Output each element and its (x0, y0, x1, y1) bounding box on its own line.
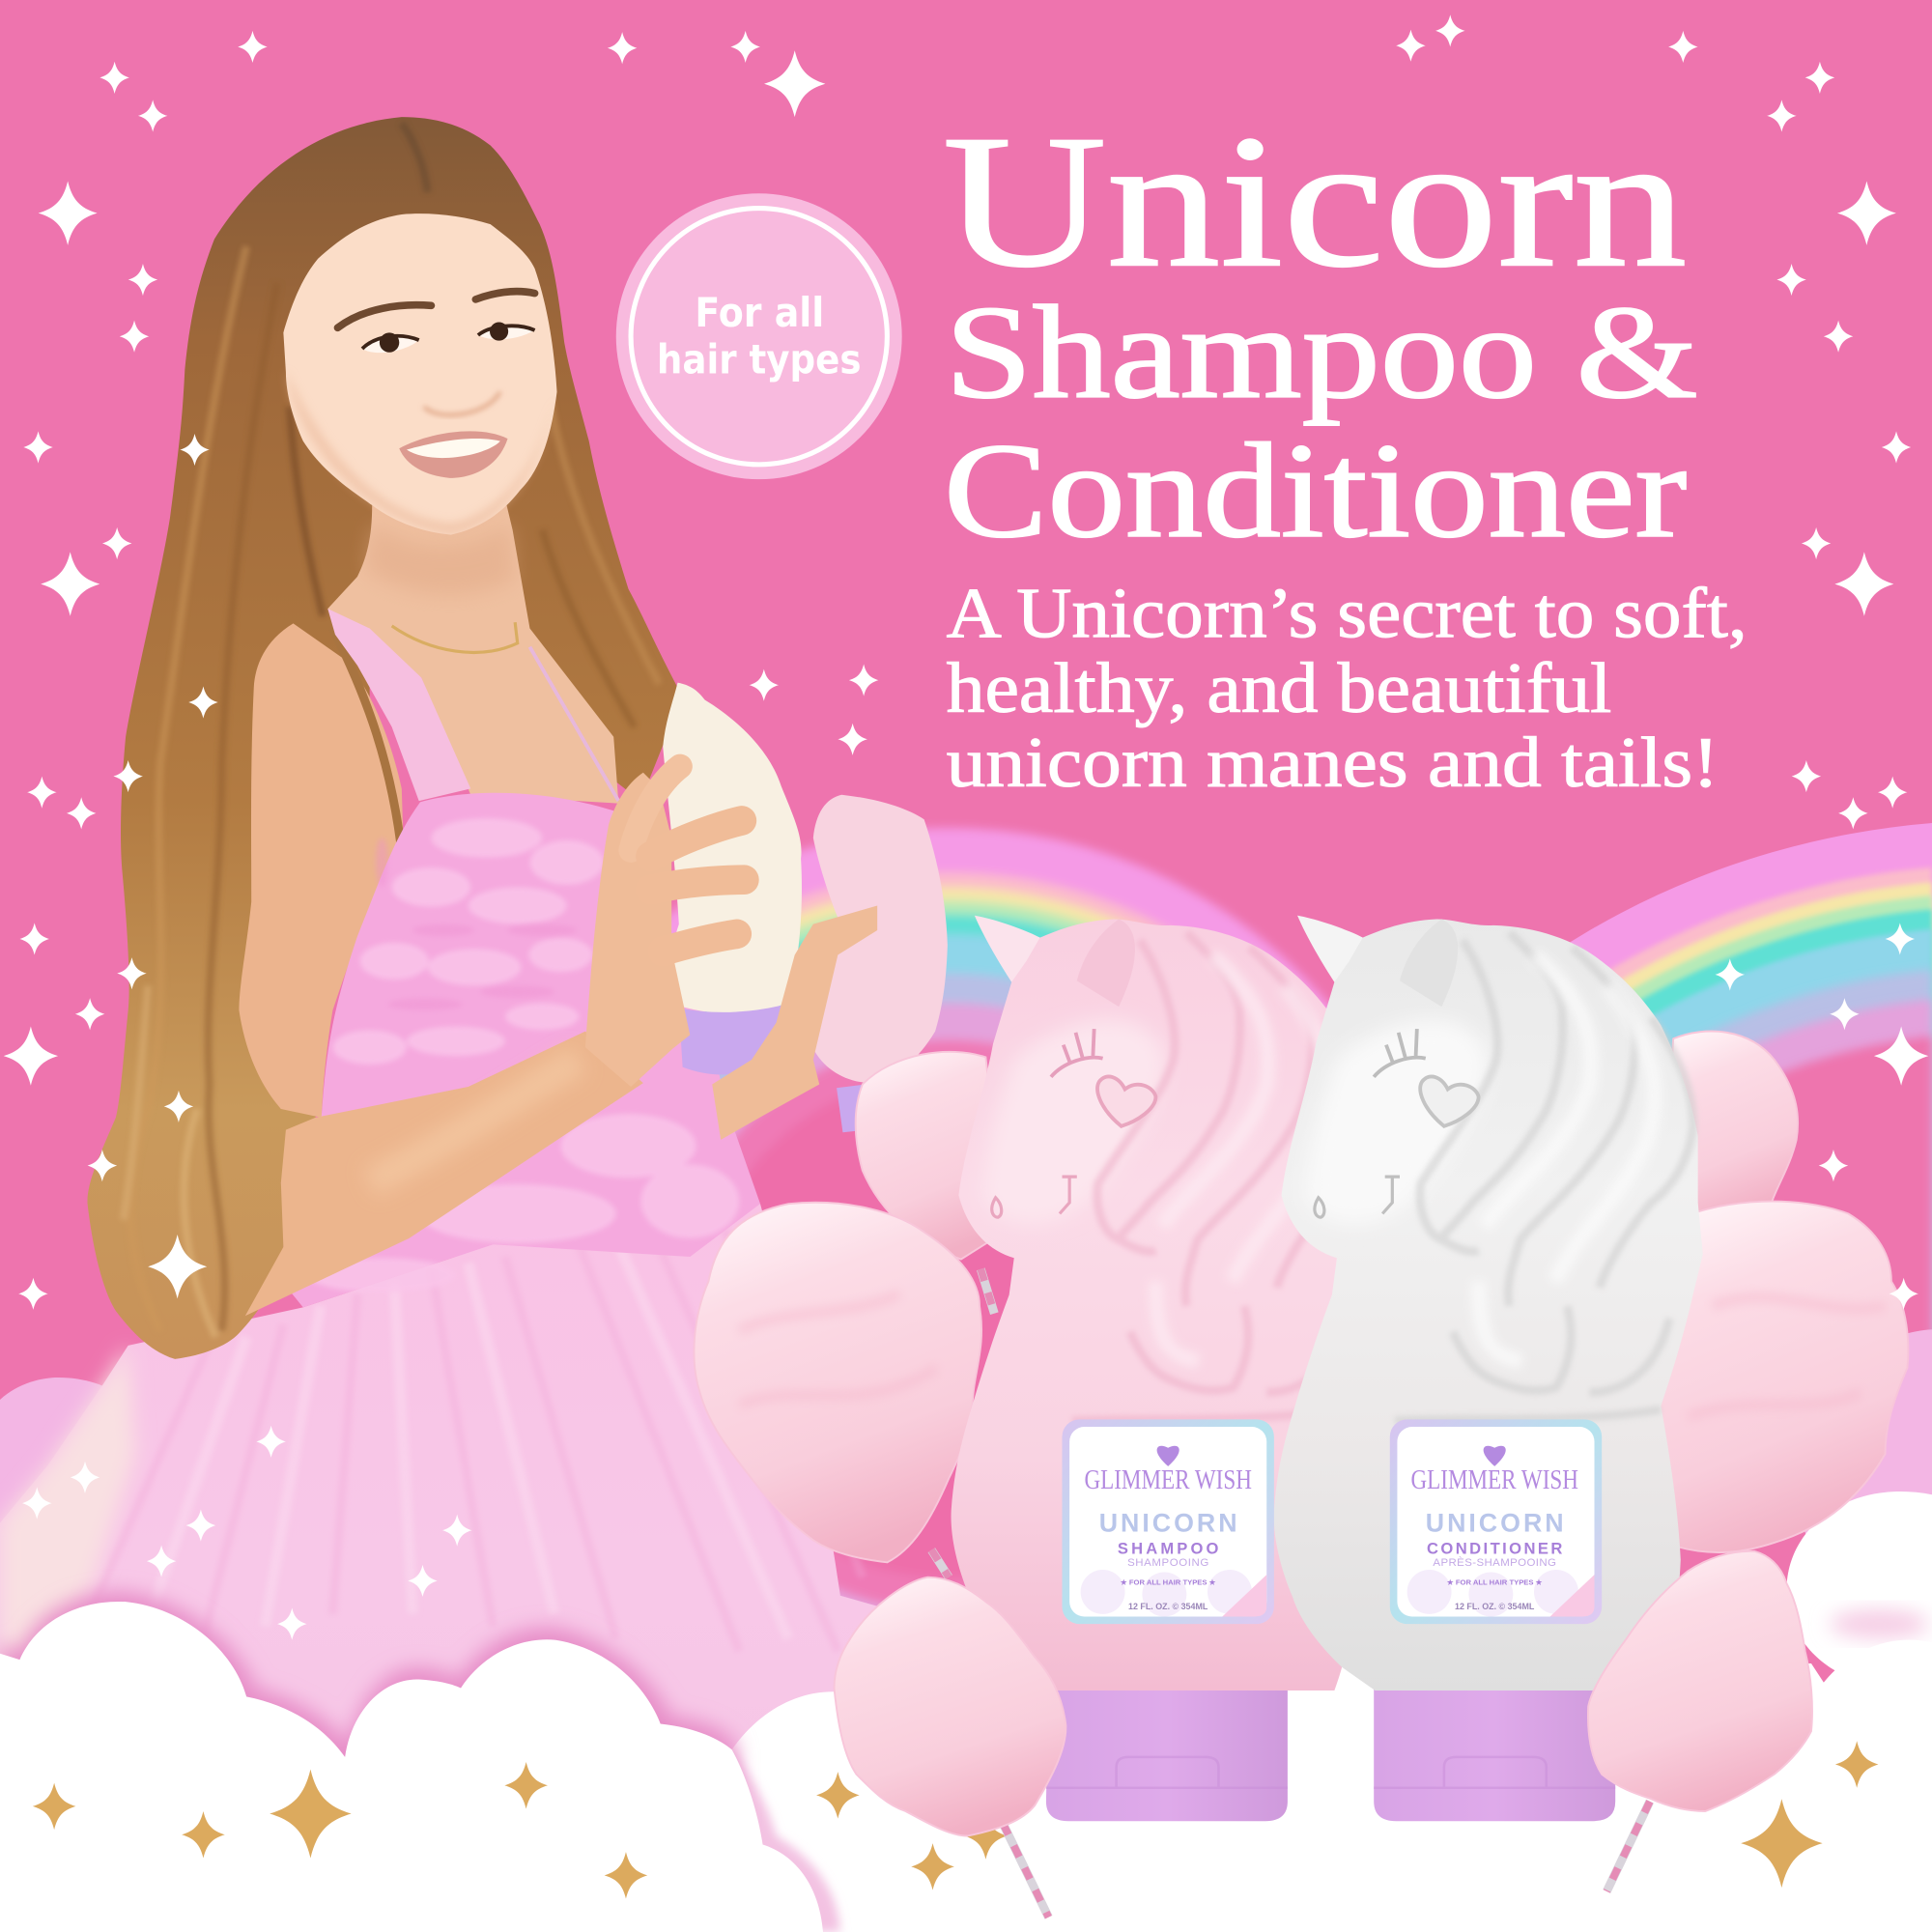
subtitle (947, 574, 1747, 803)
badge (616, 193, 902, 479)
hand holding cream bottle (585, 773, 690, 1087)
shampoo cap (1046, 1690, 1288, 1821)
conditioner bottle (1274, 916, 1703, 1821)
subtitle: healthy, and beautiful (947, 649, 1611, 728)
shampoo horn (975, 916, 1040, 982)
nose (424, 392, 500, 415)
shampoo mane highlights (1155, 955, 1332, 1361)
pink small bottle (813, 795, 948, 1083)
conditioner ear (1400, 920, 1458, 1007)
cotton candy small right (1588, 1551, 1812, 1811)
conditioner body (1274, 916, 1703, 1690)
volume: 12 FL. OZ. © 354ML (1128, 1602, 1208, 1611)
conditioner face highlight (1306, 1020, 1488, 1224)
title: Conditioner (944, 416, 1687, 566)
subtitle: unicorn manes and tails! (947, 724, 1719, 803)
neck shadow (365, 524, 515, 594)
teeth (407, 439, 500, 458)
hand holding pink bottle (712, 906, 877, 1140)
neck and chest (327, 499, 618, 804)
shampoo label (1062, 1419, 1274, 1624)
face shade (286, 370, 554, 535)
bodice (292, 793, 760, 1307)
title: Shampoo & (945, 278, 1698, 426)
bottom clouds (0, 1592, 1932, 1932)
shampoo nose and mouth (992, 1177, 1077, 1217)
skirt folds (74, 1220, 863, 1651)
gold stars (33, 1741, 1878, 1899)
shampoo heart (1097, 1076, 1155, 1126)
logo heart (1484, 1446, 1506, 1466)
back white cloud and floor (732, 1663, 1932, 1932)
cotton candy swirls (739, 1293, 1886, 1417)
no parabens corner (1222, 1575, 1266, 1616)
badge disc (616, 193, 902, 479)
thumb (631, 766, 680, 850)
shampoo face highlight (983, 1020, 1165, 1224)
cotton candy big left (694, 1203, 981, 1562)
product name: UNICORN (1426, 1508, 1564, 1537)
conditioner mane highlights (1479, 955, 1655, 1361)
bodice ruffles (308, 818, 739, 1293)
lavender clouds (0, 1329, 1932, 1640)
logo heart (1157, 1446, 1179, 1466)
product type: CONDITIONER (1427, 1539, 1562, 1557)
label clouds (1407, 1570, 1578, 1616)
shampoo mane shadows (1072, 933, 1370, 1421)
brand name: GLIMMER WISH (1084, 1465, 1252, 1495)
upper right cloud (1786, 1492, 1932, 1688)
pink small bottle cap (837, 1083, 876, 1132)
right rainbow (1188, 823, 1932, 1725)
eyebrows (337, 292, 535, 327)
french type: SHAMPOOING (1127, 1557, 1208, 1569)
cotton candy back right (1663, 1032, 1798, 1220)
forearm highlight (370, 1060, 579, 1182)
skirt pale left edge (0, 1346, 135, 1700)
product type: SHAMPOO (1118, 1539, 1219, 1557)
conditioner eyelashes (1374, 1029, 1426, 1077)
shampoo cap tab (1046, 1757, 1288, 1788)
volume: 12 FL. OZ. © 354ML (1455, 1602, 1535, 1611)
right side clouds (1786, 1492, 1932, 1848)
shampoo body (952, 916, 1380, 1690)
shampoo eyelashes (1051, 1029, 1103, 1077)
eyes (362, 323, 535, 353)
left arm (239, 623, 403, 1118)
conditioner horn (1297, 916, 1363, 982)
badge text: For all (695, 289, 824, 336)
hair types note: ★ FOR ALL HAIR TYPES ★ (1447, 1577, 1544, 1586)
conditioner cap tab (1374, 1757, 1615, 1788)
lips (399, 431, 508, 478)
strap ruffle (327, 609, 470, 801)
face (283, 213, 557, 535)
bodice ruffle shadows (376, 838, 577, 1010)
skirt (0, 1204, 985, 1932)
product name: UNICORN (1099, 1508, 1237, 1537)
cream bottle (663, 683, 802, 1013)
shoulder strand (332, 629, 404, 875)
cloud pale shadow (732, 1749, 840, 1932)
cotton candy sticks (931, 1269, 1650, 1918)
hair types note: ★ FOR ALL HAIR TYPES ★ (1121, 1577, 1217, 1586)
cloud pale shade (1830, 1609, 1928, 1638)
forearm (245, 1032, 643, 1316)
conditioner label (1390, 1419, 1602, 1624)
skirt light folds (142, 1238, 788, 1638)
fingers (650, 820, 744, 952)
cream bottle cap (679, 1006, 781, 1074)
cotton candy big right (1653, 1202, 1908, 1552)
label clouds (1081, 1570, 1252, 1616)
girl (0, 117, 985, 1932)
brand name: GLIMMER WISH (1410, 1465, 1578, 1495)
french type: APRÈS-SHAMPOOING (1433, 1556, 1556, 1569)
badge: hair types (657, 335, 862, 383)
conditioner nose and mouth (1315, 1177, 1400, 1217)
conditioner heart (1420, 1076, 1479, 1126)
shampoo ear (1077, 920, 1135, 1007)
cotton candy small left (835, 1577, 1065, 1836)
cloud shadow (0, 1592, 739, 1848)
title: Unicorn (943, 97, 1687, 306)
main white cloud (0, 1602, 823, 1932)
lower right cloud (1799, 1640, 1932, 1848)
thin dress strap (529, 647, 618, 801)
shampoo bottle (952, 916, 1380, 1821)
hair (87, 117, 678, 1359)
cotton candy back left (856, 1052, 1005, 1260)
conditioner mane shadows (1395, 933, 1693, 1421)
necklace (392, 622, 518, 652)
conditioner cap (1374, 1688, 1615, 1821)
subtitle: A Unicorn’s secret to soft, (947, 574, 1747, 653)
badge ring (631, 209, 887, 465)
hair strands (124, 124, 659, 1337)
no parabens corner (1550, 1575, 1595, 1616)
title (943, 97, 1698, 566)
left rainbow (451, 828, 1446, 1824)
